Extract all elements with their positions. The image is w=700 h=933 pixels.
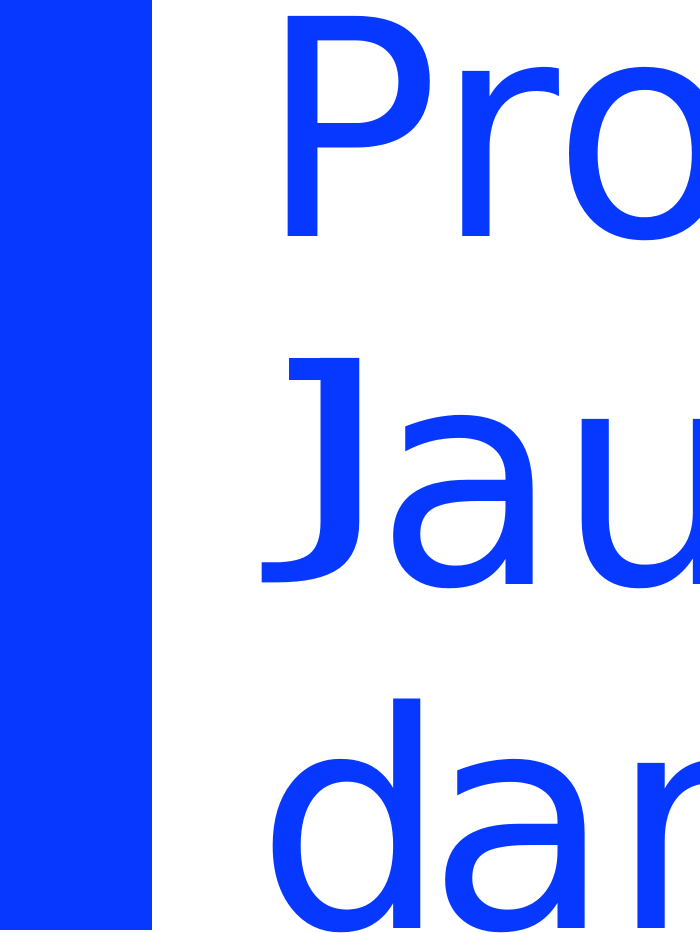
- line 3: dar: [256, 649, 700, 933]
- line 2: Jau: a: [375, 305, 560, 656]
- line 2: Jau: J: [257, 309, 398, 591]
- blue vertical bar: [0, 0, 152, 930]
- line 2: Jau: [257, 305, 700, 656]
